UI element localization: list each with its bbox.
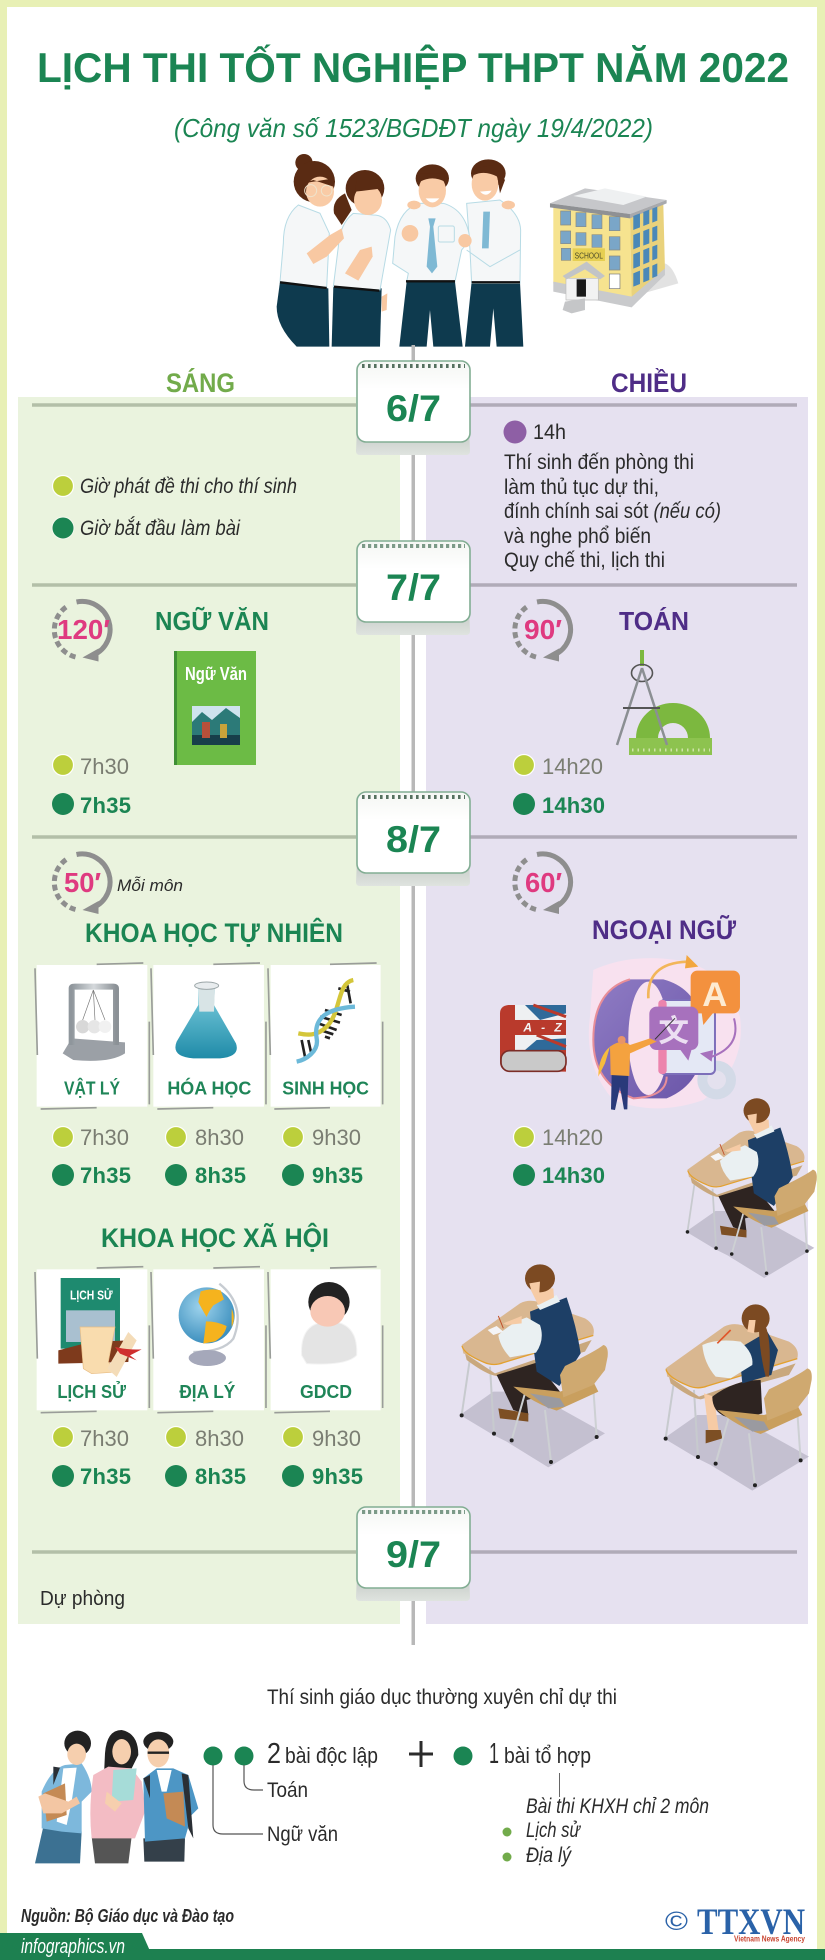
times: natural sciences bbox=[52, 1125, 363, 1188]
logo: TTXVN: TTXVN bbox=[697, 1902, 805, 1943]
diagram: one combined exam bbox=[454, 1738, 709, 1867]
card: physics: VẬT LÝ bbox=[64, 1077, 120, 1098]
card: civics bbox=[268, 1267, 383, 1413]
times: social sciences: 8h30 bbox=[195, 1426, 244, 1451]
heading: continuing education candidates: Thí sinh giáo dục thường xuyên chỉ dự thi bbox=[267, 1686, 617, 1709]
icon: English dictionary: A-Z bbox=[522, 1021, 562, 1035]
panel: afternoon column bbox=[426, 397, 808, 1624]
times: social sciences bbox=[52, 1426, 363, 1489]
column heading: afternoon: CHIỀU bbox=[611, 367, 687, 398]
text block: 6/7 afternoon procedure bbox=[504, 420, 721, 572]
timer: 50 minutes each subject bbox=[54, 854, 183, 914]
times: social sciences: 7h35 bbox=[80, 1464, 131, 1489]
logo: TTXVN: © bbox=[665, 1906, 688, 1936]
diagram: two independent exams bbox=[204, 1738, 378, 1846]
illustration: student at desk, upper bbox=[686, 1098, 817, 1278]
heading: Ngữ văn: NGỮ VĂN bbox=[155, 606, 269, 636]
card: geography bbox=[151, 1267, 266, 1413]
times: social sciences: 7h30 bbox=[80, 1426, 129, 1451]
icon: English dictionary bbox=[500, 1005, 566, 1072]
times: natural sciences: 8h30 bbox=[195, 1125, 244, 1150]
diagram: two independent exams: Toán bbox=[267, 1779, 308, 1802]
icon: compass and protractor bbox=[617, 650, 712, 755]
calendar: 9/7: 9/7 bbox=[386, 1534, 441, 1575]
legend: exam hand-out and start time: Giờ bắt đầu làm bài bbox=[80, 517, 241, 540]
column heading: morning: SÁNG bbox=[166, 367, 235, 398]
calendar: 7/7 bbox=[356, 541, 470, 635]
text block: 6/7 afternoon procedure: đính chính sai sót (nếu có) bbox=[504, 500, 721, 523]
diagram: two independent exams: 2 bbox=[267, 1738, 281, 1770]
card: physics bbox=[35, 963, 149, 1109]
times: natural sciences: 7h30 bbox=[80, 1125, 129, 1150]
times: foreign language: 14h30 bbox=[542, 1163, 605, 1188]
times: Ngữ văn bbox=[52, 754, 131, 818]
illustration: school building: SCHOOL bbox=[575, 252, 603, 261]
times: Toán bbox=[513, 754, 605, 818]
icon: Ngữ văn textbook bbox=[174, 651, 256, 765]
diagram: two independent exams: bài độc lập bbox=[285, 1743, 378, 1768]
card: history: LỊCH SỬ bbox=[57, 1381, 126, 1402]
card: biology bbox=[268, 963, 383, 1109]
footer bar: infographics.vn bbox=[21, 1936, 125, 1958]
logo: TTXVN bbox=[665, 1902, 805, 1944]
illustration: school building bbox=[550, 188, 678, 313]
timer: 90 minutes: 90′ bbox=[524, 614, 562, 645]
calendar: 8/7 bbox=[356, 792, 470, 886]
icon: translation illustration bbox=[589, 955, 741, 1110]
card: history bbox=[35, 1267, 149, 1413]
text: reserve day: Dự phòng bbox=[40, 1588, 125, 1610]
times: social sciences: 9h30 bbox=[312, 1426, 361, 1451]
legend: exam hand-out and start time bbox=[52, 475, 297, 540]
times: Ngữ văn: 7h30 bbox=[80, 754, 129, 779]
heading: social sciences: KHOA HỌC XÃ HỘI bbox=[101, 1222, 329, 1253]
illustration: female student at desk bbox=[664, 1304, 812, 1491]
legend: exam hand-out and start time: Giờ phát đề thi cho thí sinh bbox=[80, 475, 297, 498]
card: civics: GDCD bbox=[300, 1381, 352, 1402]
times: social sciences: 9h35 bbox=[312, 1464, 363, 1489]
times: natural sciences: 8h35 bbox=[195, 1163, 246, 1188]
times: foreign language bbox=[513, 1125, 605, 1188]
icon: translation illustration: A bbox=[702, 976, 727, 1014]
text block: 6/7 afternoon procedure: Thí sinh đến phòng thi bbox=[504, 451, 694, 474]
illustration: four students bbox=[277, 154, 523, 347]
source line: Nguồn: Bộ Giáo dục và Đào tạo bbox=[21, 1906, 234, 1926]
icon: Ngữ văn textbook: Ngữ Văn bbox=[185, 664, 247, 684]
times: Toán: 14h30 bbox=[542, 793, 605, 818]
illustration: three students with books bbox=[35, 1730, 198, 1863]
heading: foreign language: NGOẠI NGỮ bbox=[592, 914, 737, 945]
timer: 50 minutes each subject: 50′ bbox=[64, 867, 101, 898]
times: natural sciences: 9h35 bbox=[312, 1163, 363, 1188]
timer: 60 minutes: 60′ bbox=[525, 867, 562, 898]
diagram: two independent exams: Ngữ văn bbox=[267, 1823, 338, 1846]
illustration: male student at desk bbox=[460, 1264, 608, 1467]
timer: 120 minutes bbox=[54, 601, 110, 662]
times: natural sciences: 9h30 bbox=[312, 1125, 361, 1150]
diagram: one combined exam: 1 bbox=[489, 1738, 499, 1770]
logo: TTXVN: Vietnam News Agency bbox=[734, 1934, 805, 1944]
panel: morning column bbox=[18, 397, 400, 1624]
times: foreign language: 14h20 bbox=[542, 1125, 603, 1150]
calendar: 9/7 bbox=[356, 1507, 470, 1601]
calendar: 6/7: 6/7 bbox=[386, 388, 441, 429]
card: history: LỊCH SỬ bbox=[70, 1287, 113, 1302]
card: chemistry bbox=[151, 963, 266, 1109]
diagram: one combined exam: bài tổ hợp bbox=[504, 1743, 591, 1768]
times: natural sciences: 7h35 bbox=[80, 1163, 131, 1188]
card: chemistry: HÓA HỌC bbox=[167, 1077, 251, 1098]
title: LỊCH THI TỐT NGHIỆP THPT NĂM 2022 bbox=[37, 43, 789, 91]
calendar: 7/7: 7/7 bbox=[386, 567, 441, 608]
calendar: 8/7: 8/7 bbox=[386, 819, 441, 860]
heading: natural sciences: KHOA HỌC TỰ NHIÊN bbox=[85, 917, 343, 948]
times: Ngữ văn: 7h35 bbox=[80, 793, 131, 818]
footer bar bbox=[0, 1933, 825, 1960]
card: biology: SINH HỌC bbox=[282, 1077, 369, 1098]
timer: 60 minutes bbox=[515, 854, 571, 914]
icon: translation illustration: 文 bbox=[658, 1015, 689, 1049]
text block: 6/7 afternoon procedure: Quy chế thi, lịch thi bbox=[504, 549, 665, 572]
diagram: one combined exam: Địa lý bbox=[526, 1844, 572, 1867]
timer: 120 minutes: 120′ bbox=[57, 614, 110, 645]
timer: 90 minutes bbox=[515, 601, 571, 662]
text block: 6/7 afternoon procedure: và nghe phổ biến bbox=[504, 525, 651, 548]
diagram: one combined exam: Lịch sử bbox=[526, 1819, 581, 1842]
calendar: 6/7 bbox=[356, 361, 470, 455]
diagram: one combined exam: Bài thi KHXH chỉ 2 môn bbox=[526, 1795, 709, 1818]
times: social sciences: 8h35 bbox=[195, 1464, 246, 1489]
subtitle: (Công văn số 1523/BGDĐT ngày 19/4/2022) bbox=[174, 113, 653, 143]
times: Toán: 14h20 bbox=[542, 754, 603, 779]
heading: Toán: TOÁN bbox=[619, 606, 689, 636]
card: geography: ĐỊA LÝ bbox=[179, 1381, 236, 1402]
timer: 50 minutes each subject: Mỗi môn bbox=[117, 876, 183, 895]
text block: 6/7 afternoon procedure: 14h bbox=[533, 421, 566, 444]
text block: 6/7 afternoon procedure: làm thủ tục dự thi, bbox=[504, 476, 659, 499]
icon: plus sign bbox=[409, 1741, 433, 1767]
